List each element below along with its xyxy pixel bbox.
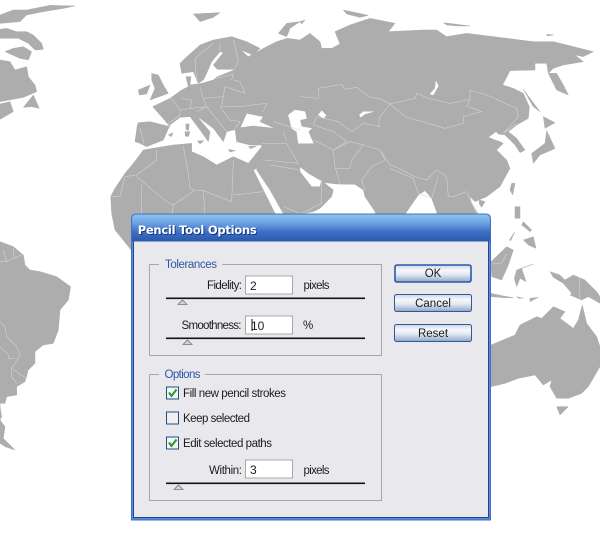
input: Fidelity value bbox=[246, 276, 292, 294]
slider: Within bbox=[166, 482, 365, 490]
unit: percent: % bbox=[303, 320, 313, 332]
label: Smoothness: Smoothness: bbox=[182, 320, 242, 332]
map: South America bbox=[0, 242, 71, 450]
label: Within: Within: bbox=[209, 465, 242, 477]
dialog window frame bbox=[132, 214, 490, 520]
title shadow: Pencil Tool Options bbox=[139, 224, 258, 238]
label: Fidelity: Fidelity: bbox=[207, 280, 242, 292]
slider: Smoothness bbox=[166, 338, 365, 344]
button: Reset bbox=[394, 324, 472, 342]
slider: Fidelity bbox=[166, 298, 365, 304]
heading: Tolerances: Tolerances bbox=[165, 259, 217, 271]
input: Within value bbox=[246, 460, 292, 478]
unit: pixels: pixels bbox=[304, 465, 330, 477]
map: North America bbox=[0, 5, 75, 119]
heading: Options: Options bbox=[164, 369, 201, 381]
map: Eurasia bbox=[135, 18, 593, 217]
button: Cancel: Cancel bbox=[415, 298, 451, 310]
panel: Tolerances bbox=[150, 259, 382, 356]
map: inland seas bbox=[288, 81, 438, 143]
panel: Options bbox=[150, 369, 382, 500]
button: Reset: Reset bbox=[418, 328, 449, 340]
map: Oceania and South-East Asia islands bbox=[491, 207, 600, 415]
map: country borders bbox=[0, 40, 580, 383]
unit: pixels: pixels bbox=[304, 280, 330, 292]
input: Fidelity value: 2 bbox=[250, 279, 257, 293]
checkbox: Edit selected paths: Edit selected paths bbox=[183, 438, 272, 450]
title text: Pencil Tool Options bbox=[138, 223, 257, 237]
input: Smoothness value: 10 bbox=[251, 319, 265, 333]
checkbox: Fill new pencil strokes: Fill new pencil strokes bbox=[183, 388, 286, 400]
checkbox: Keep selected: Keep selected bbox=[183, 413, 250, 425]
button: OK bbox=[395, 265, 471, 282]
dialog body bbox=[134, 241, 488, 518]
input: Smoothness value bbox=[246, 316, 292, 334]
map: Africa bbox=[111, 143, 277, 252]
input: Within value: 3 bbox=[250, 463, 257, 477]
dialog: Pencil Tool Options bbox=[132, 214, 490, 520]
map: islands bbox=[138, 10, 555, 207]
button: Cancel bbox=[394, 294, 472, 312]
button: OK: OK bbox=[425, 268, 442, 280]
title bar bbox=[132, 214, 490, 242]
